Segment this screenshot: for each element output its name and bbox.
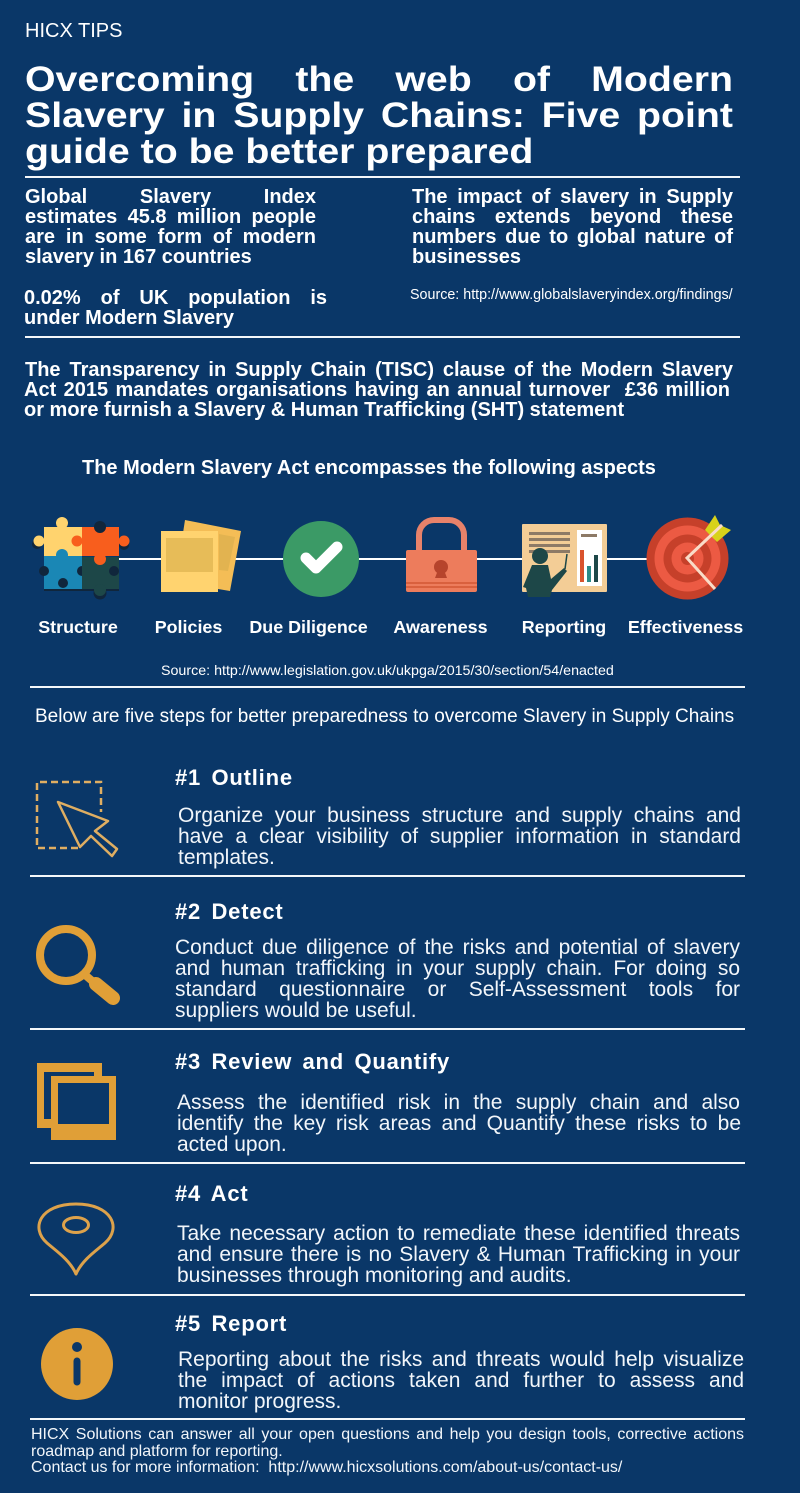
step 1 — [36, 765, 741, 869]
icon: photo frames — [37, 1063, 116, 1140]
step 2 text: Conduct due diligence of the risks and potential of slavery — [175, 936, 740, 959]
icon: due diligence check — [283, 521, 359, 597]
step 4 text: businesses through monitoring and audits. — [177, 1264, 572, 1287]
text block: global slavery index estimate: slavery in 167 countries — [25, 246, 252, 268]
step 3 text: Assess the identified risk in the supply chain and also — [177, 1091, 740, 1114]
icon: target — [646, 515, 731, 600]
aspect labels: Due Diligence — [249, 617, 368, 637]
source note: legislation: Source: http://www.legislation.gov.uk/ukpga/2015/30/section/54/enacted — [161, 663, 614, 679]
aspect labels: Policies — [155, 617, 222, 637]
aspect labels: Structure — [38, 617, 118, 637]
step 5 heading: #5 Report — [175, 1311, 287, 1336]
step 1 text — [178, 804, 741, 869]
step 4 — [37, 1181, 740, 1287]
step 4 text: and ensure there is no Slavery & Human Trafficking in your — [177, 1243, 740, 1266]
icon: padlock — [406, 520, 477, 592]
step 5 text: monitor progress. — [178, 1390, 341, 1413]
title: Overcoming the web of Modern — [25, 60, 733, 99]
text block: global slavery index estimate: estimates 45.8 million people — [25, 206, 316, 228]
icon: puzzle — [32, 517, 130, 600]
icon: reporting presenter — [522, 524, 607, 597]
text block: TISC clause: The Transparency in Supply Chain (TISC) clause of the Modern Slavery — [25, 359, 733, 381]
text block: impact of slavery: businesses — [412, 246, 521, 268]
icon: cursor — [36, 780, 118, 858]
text block: UK population — [24, 287, 327, 329]
text block: global slavery index estimate: are in some form of modern — [25, 226, 316, 248]
brand label: HICX TIPS — [25, 20, 122, 42]
source note: global slavery index: Source: http://www.globalslaveryindex.org/findings/ — [410, 287, 733, 303]
step 3 — [37, 1049, 741, 1156]
step 2 text: standard questionnaire or Self-Assessment tools for — [175, 978, 740, 1001]
step 4 heading: #4 Act — [175, 1181, 249, 1206]
text block: impact of slavery: chains extends beyond these — [412, 206, 733, 228]
title: Slavery in Supply Chains: Five point — [25, 96, 733, 135]
step 5 text — [178, 1348, 744, 1413]
aspect labels — [38, 617, 743, 637]
icon: map pin — [37, 1202, 115, 1276]
text block: global slavery index estimate — [25, 186, 316, 268]
step 2 — [36, 899, 740, 1022]
closing contact text: HICX Solutions can answer all your open questions and help you design tools, corrective actions — [31, 1426, 744, 1443]
step 4 text: Take necessary action to remediate these identified threats — [177, 1222, 740, 1245]
step 5 text: the impact of actions taken and further to assess and — [178, 1369, 744, 1392]
steps intro: Below are five steps for better preparedness to overcome Slavery in Supply Chains — [35, 706, 734, 727]
step 5 text: Reporting about the risks and threats would help visualize — [178, 1348, 744, 1371]
title — [25, 60, 733, 171]
aspect labels: Reporting — [522, 617, 606, 637]
text block: impact of slavery: numbers due to global nature of — [412, 226, 733, 248]
closing contact text — [31, 1426, 744, 1476]
icon: info — [41, 1328, 113, 1400]
icon: policies — [161, 520, 241, 592]
step 2 text — [175, 936, 740, 1022]
aspect labels: Effectiveness — [628, 617, 743, 637]
icon: magnifier — [36, 925, 120, 1005]
step 3 text: identify the key risk areas and Quantify these risks to be — [177, 1112, 741, 1135]
step 3 text: acted upon. — [177, 1133, 287, 1156]
text block: TISC clause: Act 2015 mandates organisations having an annual turnover £36 million — [24, 379, 730, 401]
aspects heading: The Modern Slavery Act encompasses the following aspects — [82, 457, 656, 479]
step 2 heading: #2 Detect — [175, 899, 284, 924]
title: guide to be better prepared — [25, 132, 533, 171]
closing contact text: Contact us for more information: http://www.hicxsolutions.com/about-us/contact-us/ — [31, 1459, 622, 1476]
step 1 text: Organize your business structure and supply chains and — [178, 804, 741, 827]
step 2 text: suppliers would be useful. — [175, 999, 417, 1022]
text block: TISC clause — [24, 359, 733, 421]
aspect labels: Awareness — [393, 617, 488, 637]
step 3 heading: #3 Review and Quantify — [175, 1049, 450, 1074]
step 1 heading: #1 Outline — [175, 765, 293, 790]
text block: impact of slavery: The impact of slavery in Supply — [412, 186, 733, 208]
aspects timeline — [32, 515, 731, 600]
text block: UK population: under Modern Slavery — [24, 307, 234, 329]
text block: UK population: 0.02% of UK population is — [24, 287, 327, 309]
text block: global slavery index estimate: Global Slavery Index — [25, 186, 316, 208]
step 4 text — [177, 1222, 740, 1287]
step 1 text: have a clear visibility of supplier information in standard — [178, 825, 741, 848]
step 3 text — [177, 1091, 741, 1156]
closing contact text: roadmap and platform for reporting. — [31, 1443, 283, 1460]
text block: TISC clause: or more furnish a Slavery & Human Trafficking (SHT) statement — [24, 399, 624, 421]
text block: impact of slavery — [412, 186, 734, 268]
step 1 text: templates. — [178, 846, 275, 869]
step 5 — [41, 1311, 744, 1413]
step 2 text: and human trafficking in your supply chain. For doing so — [175, 957, 740, 980]
